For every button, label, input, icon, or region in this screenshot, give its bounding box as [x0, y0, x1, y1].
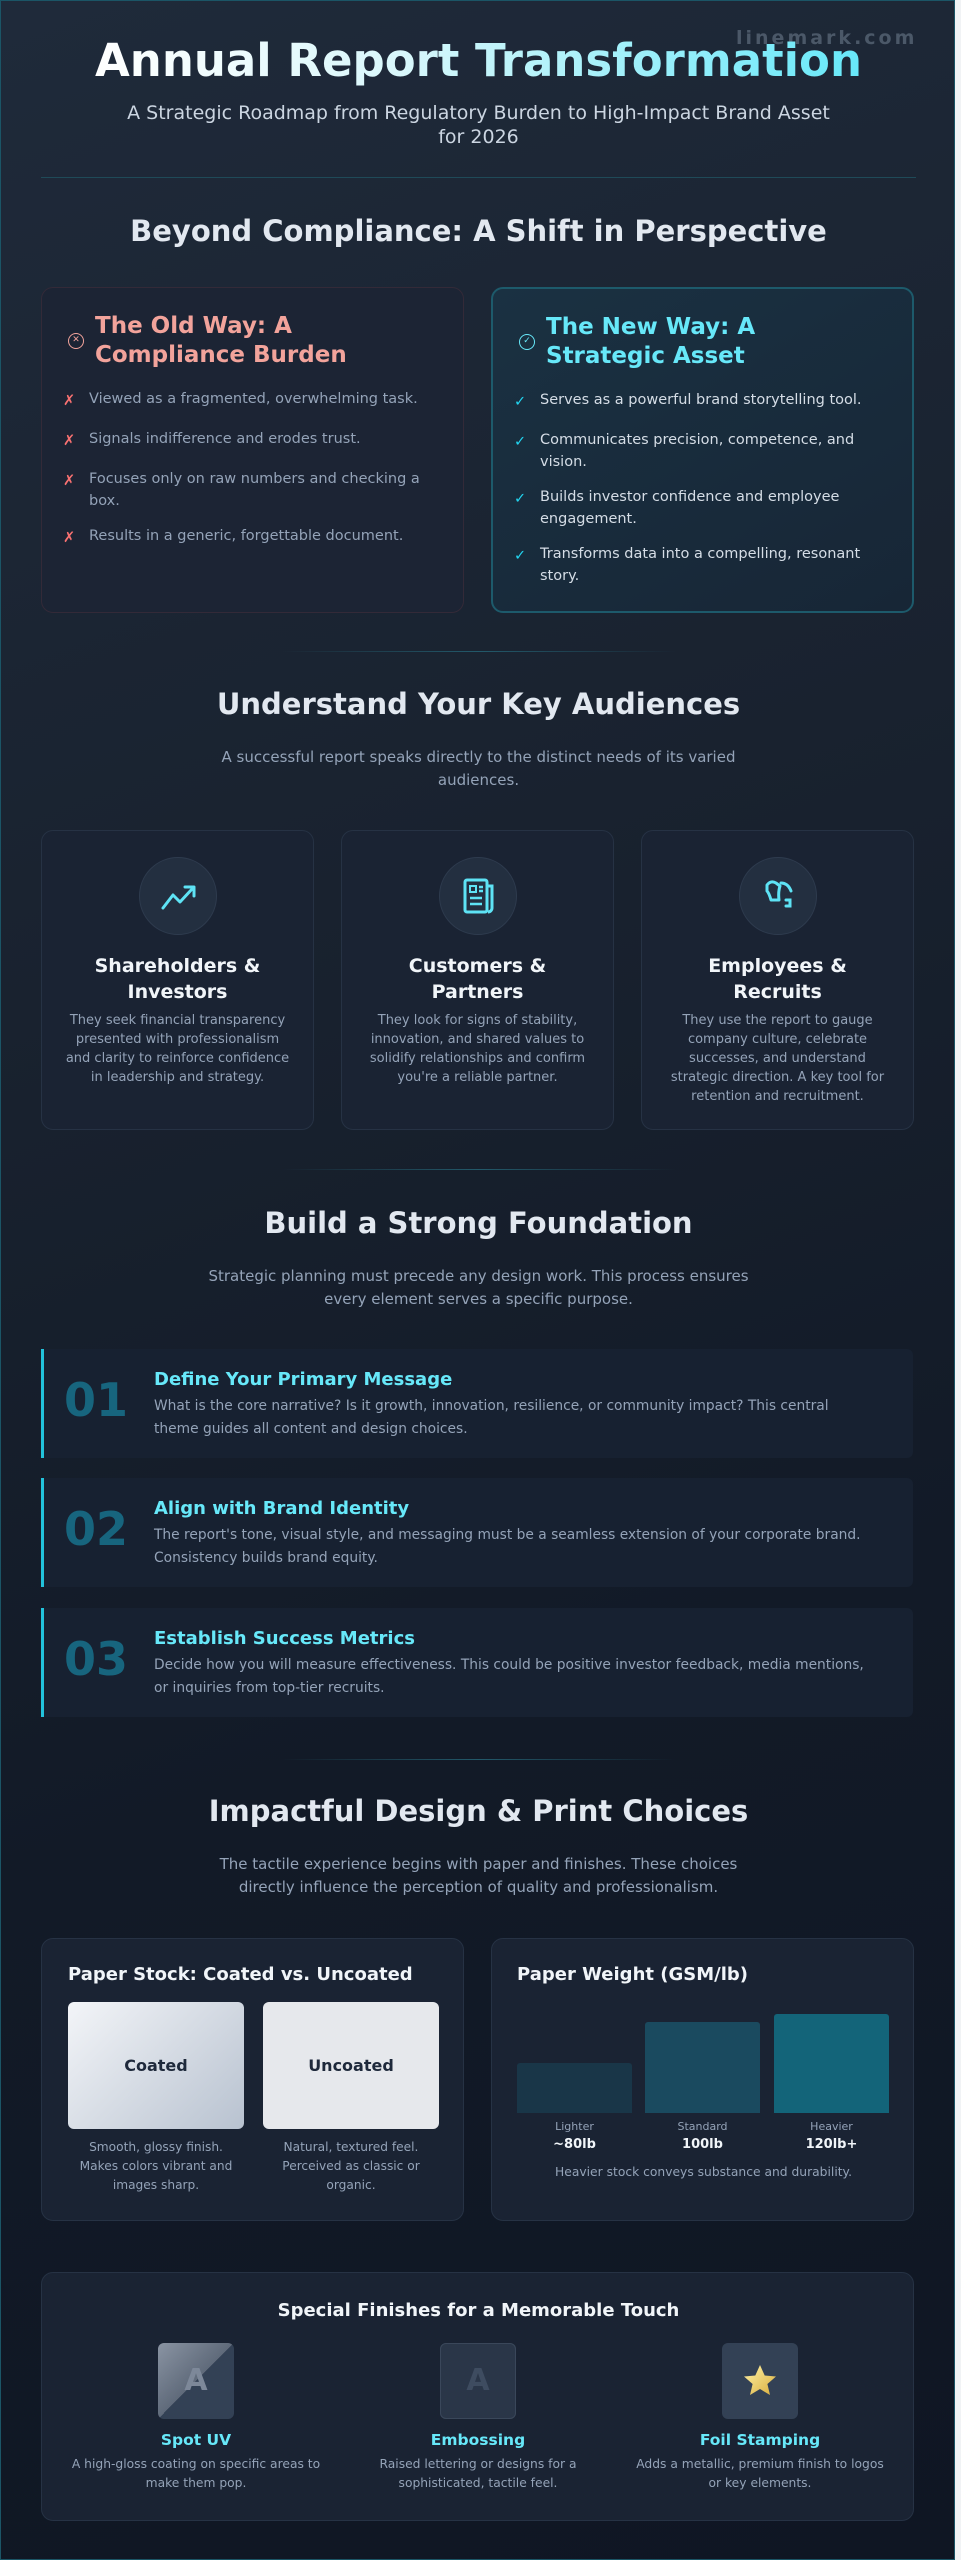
step 01: 01 [64, 1373, 128, 1427]
panel: shareholders: Shareholders & [95, 955, 260, 977]
panel: special finishes [41, 2272, 914, 2521]
new way list: ✓ [514, 548, 526, 564]
design intro: directly influence the perception of quality and professionalism. [239, 1878, 718, 1896]
old way list: Results in a generic, forgettable document. [89, 528, 403, 544]
old way heading: The Old Way: A [95, 313, 292, 339]
panel: old way [41, 287, 464, 613]
swatch: uncoated: Uncoated [308, 2056, 394, 2075]
icon: x circle [68, 333, 84, 349]
panel: new way [491, 287, 914, 613]
finish: embossing [379, 2343, 577, 2490]
step 02: Align with Brand Identity [154, 1498, 409, 1519]
design intro [220, 1855, 737, 1896]
audiences intro [222, 748, 735, 789]
icon: check circle: ✓ [523, 336, 531, 346]
bar chart: Heavier [810, 2120, 853, 2133]
panel: shareholders [41, 830, 314, 1130]
foundation intro: Strategic planning must precede any design work. This process ensures [208, 1267, 749, 1285]
new way heading [546, 314, 755, 369]
panel: paper weight chart: Paper Weight (GSM/lb) [517, 1964, 748, 1985]
panel: paper stock [41, 1938, 464, 2221]
new way list: Serves as a powerful brand storytelling tool. [540, 392, 862, 408]
panel: special finishes: Special Finishes for a Memorable Touch [278, 2300, 679, 2321]
audiences intro: A successful report speaks directly to the distinct needs of its varied [222, 748, 735, 766]
bar chart: Standard [677, 2120, 728, 2133]
new way list: Communicates precision, competence, and vision. [540, 432, 854, 470]
icon: check circle [519, 334, 535, 350]
step 03: 03 [64, 1632, 128, 1686]
old way list: Signals indifference and erodes trust. [89, 431, 361, 447]
chart caption: Heavier stock conveys substance and durability. [555, 2165, 852, 2179]
panel: special finishes: Raised lettering or designs for a sophisticated, tactile feel. [379, 2457, 577, 2490]
subtitle: A Strategic Roadmap from Regulatory Burden to High-Impact Brand Asset [127, 102, 830, 124]
bar chart: 100lb [682, 2137, 723, 2152]
audiences intro: audiences. [438, 771, 519, 789]
finish: spot uv [72, 2343, 320, 2490]
bar chart [517, 2014, 889, 2152]
heading: beyond compliance: Beyond Compliance: A Shift in Perspective [130, 214, 827, 248]
old way list: ✗ [63, 530, 75, 546]
icon: handshake [738, 857, 816, 935]
new way list: Builds investor confidence and employee engagement. [540, 489, 839, 527]
foundation intro [208, 1267, 749, 1308]
subtitle: for 2026 [438, 126, 519, 148]
old way heading [95, 313, 347, 368]
heading: design & print: Impactful Design & Print Choices [209, 1794, 748, 1828]
step 02: The report's tone, visual style, and messaging must be a seamless extension of your corporate brand. Consistency builds brand equity. [154, 1527, 861, 1566]
step 01 [41, 1349, 913, 1458]
panel: special finishes: Embossing [431, 2431, 525, 2449]
panel: shareholders: They seek financial transparency presented with professionalism and clarity to reinforce confidence in leadership and strategy. [66, 1013, 289, 1085]
design intro: The tactile experience begins with paper and finishes. These choices [220, 1855, 737, 1873]
panel: special finishes: A high-gloss coating on specific areas to make them pop. [72, 2457, 320, 2490]
panel: customers: They look for signs of stability, innovation, and shared values to solidify relationships and confirm you're a reliable partner. [370, 1013, 585, 1085]
new way list: ✓ [514, 394, 526, 410]
bar chart: ~80lb [553, 2137, 596, 2152]
uncoated description: Natural, textured feel. Perceived as classic or organic. [282, 2140, 420, 2192]
panel: customers: Customers & [409, 955, 546, 977]
heading: audiences: Understand Your Key Audiences [217, 687, 740, 721]
step 03: Decide how you will measure effectiveness. This could be positive investor feedback, media mentions, or inquiries from top-tier recruits. [154, 1657, 864, 1696]
panel: customers: Partners [432, 981, 523, 1003]
swatch: coated: Coated [124, 2056, 188, 2075]
panel: special finishes: Adds a metallic, premium finish to logos or key elements. [636, 2457, 884, 2490]
old way heading: Compliance Burden [95, 342, 347, 368]
finish: foil stamping [636, 2343, 884, 2490]
new way heading: Strategic Asset [546, 343, 745, 369]
old way list: ✗ [63, 393, 75, 409]
panel: paper weight chart [491, 1938, 914, 2221]
swatch: coated [68, 2002, 244, 2129]
panel: employees [641, 830, 914, 1130]
new way heading: The New Way: A [546, 314, 755, 340]
panel: special finishes: Spot UV [161, 2431, 231, 2449]
new way list: Transforms data into a compelling, resonant story. [540, 546, 860, 584]
bar chart: Lighter [555, 2120, 594, 2133]
new way list: ✓ [514, 491, 526, 507]
panel: special finishes: A [184, 2363, 208, 2398]
panel: shareholders: Investors [128, 981, 228, 1003]
panel: customers [341, 830, 614, 1130]
step 01: What is the core narrative? Is it growth, innovation, resilience, or community impact? This central theme guides all content and design choices. [154, 1398, 829, 1437]
panel: special finishes: Foil Stamping [700, 2431, 820, 2449]
old way list: Focuses only on raw numbers and checking a box. [89, 471, 420, 509]
old way list: Viewed as a fragmented, overwhelming task. [89, 391, 418, 407]
watermark: linemark.com [736, 27, 917, 49]
foundation intro: every element serves a specific purpose. [324, 1290, 633, 1308]
swatch: uncoated [263, 2002, 439, 2129]
step 02: 02 [64, 1502, 128, 1556]
old way list [63, 391, 420, 546]
coated description: Smooth, glossy finish. Makes colors vibrant and images sharp. [80, 2140, 232, 2192]
new way list [514, 392, 862, 584]
step 01: Define Your Primary Message [154, 1369, 452, 1390]
icon: newspaper [438, 857, 516, 935]
panel: employees: Employees & [708, 955, 847, 977]
step 03 [41, 1608, 913, 1717]
step 03: Establish Success Metrics [154, 1628, 415, 1649]
title: Annual Report Transformation [95, 34, 862, 87]
heading: foundation: Build a Strong Foundation [264, 1206, 693, 1240]
subtitle [127, 102, 830, 148]
panel: special finishes: A [466, 2363, 490, 2398]
new way list: ✓ [514, 434, 526, 450]
old way list: ✗ [63, 433, 75, 449]
icon: x circle: ✕ [72, 335, 80, 345]
bar chart: 120lb+ [806, 2137, 857, 2152]
icon: trend arrow [138, 857, 216, 935]
old way list: ✗ [63, 473, 75, 489]
step 02 [41, 1478, 913, 1587]
panel: employees: Recruits [733, 981, 822, 1003]
panel: employees: They use the report to gauge company culture, celebrate successes, and understand strategic direction. A key tool for retention and recruitment. [671, 1013, 884, 1104]
panel: paper stock: Paper Stock: Coated vs. Uncoated [68, 1964, 413, 1985]
